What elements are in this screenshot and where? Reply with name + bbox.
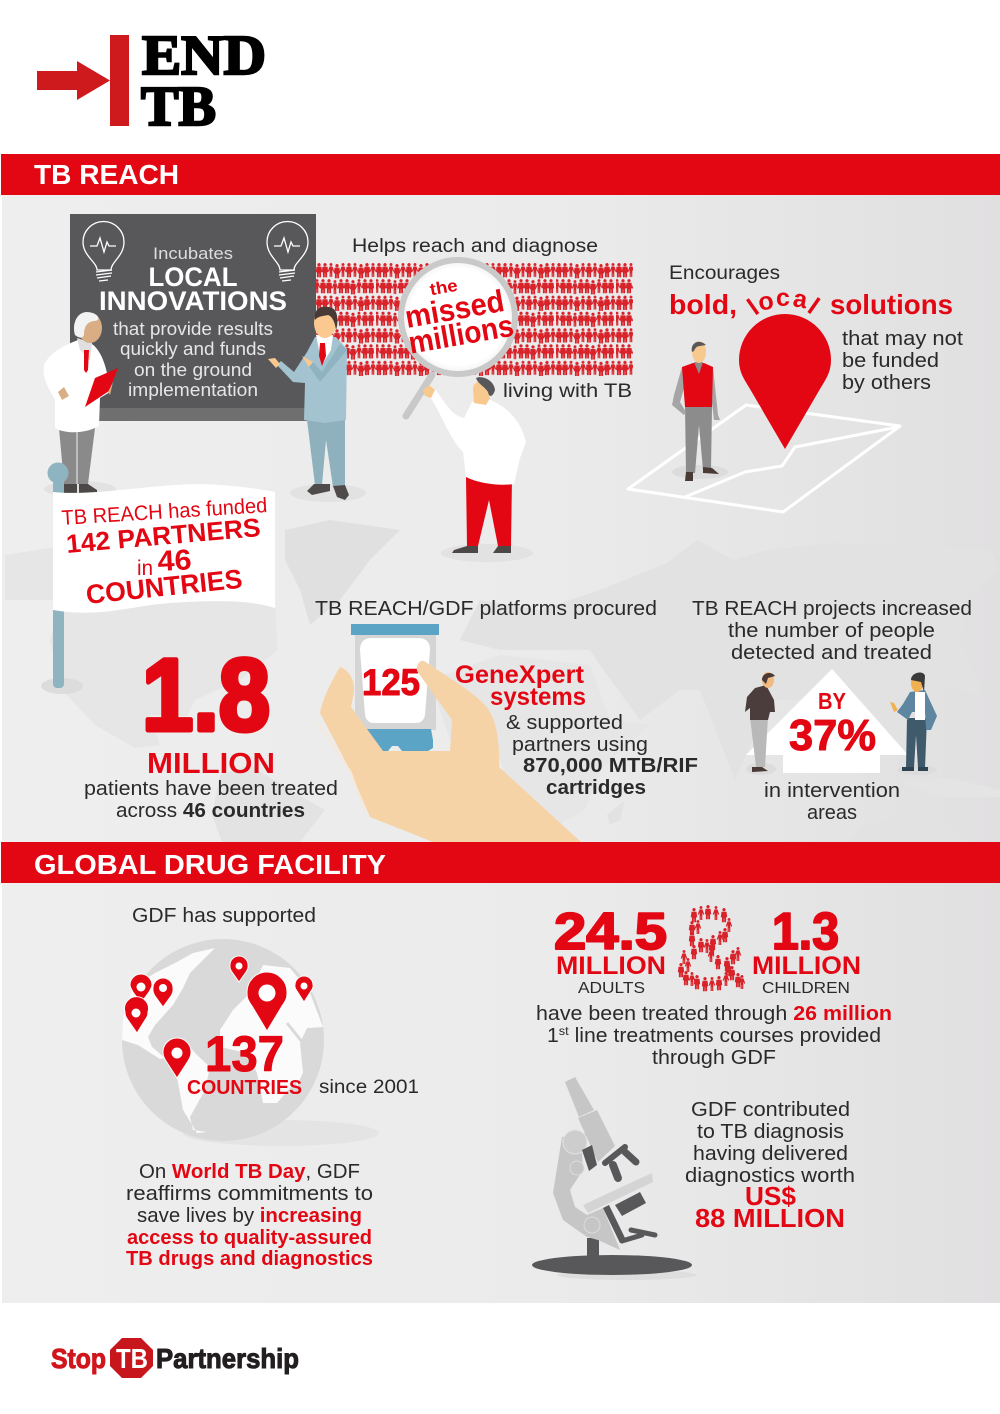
text: GDF contributed: having delivered bbox=[693, 1143, 848, 1165]
flag: partners bbox=[53, 484, 275, 613]
lens text: the missed millions: the bbox=[428, 276, 459, 299]
text: GDF contributed: GDF contributed bbox=[691, 1099, 850, 1121]
text: GeneXpert systems: & supported bbox=[506, 712, 623, 734]
text: World TB Day bbox=[126, 1161, 373, 1270]
text: treated through: 1 bbox=[547, 1025, 558, 1047]
text: GeneXpert systems: partners using bbox=[512, 734, 648, 756]
figure: man with magnifying glass bbox=[428, 377, 533, 562]
pin Canada west bbox=[130, 974, 152, 1003]
text: GDF contributed: US$ bbox=[745, 1181, 797, 1211]
text: treated through: have been treated through 26 million bbox=[536, 1003, 892, 1025]
arrow: up by 37%: BY bbox=[818, 688, 846, 714]
figure: thinking man bbox=[745, 672, 776, 775]
logo: Stop TB Partnership: TB bbox=[116, 1343, 148, 1374]
grey content panel bbox=[2, 195, 1000, 1303]
stat: 24.5 million adults: MILLION bbox=[556, 952, 666, 980]
text: treated through: through GDF bbox=[652, 1047, 776, 1069]
text: projects increased: the number of people bbox=[728, 620, 935, 642]
stat: 24.5 million adults: 24.5 bbox=[554, 903, 667, 961]
stat: 1.8 million patients bbox=[84, 638, 338, 822]
text: GeneXpert systems: cartridges bbox=[546, 777, 646, 799]
text: that may not be funded by others: by others bbox=[842, 372, 931, 394]
text: treated through: line treatments courses provided bbox=[569, 1025, 881, 1047]
section header: Global Drug Facility: GLOBAL DRUG FACILITY bbox=[34, 849, 386, 880]
section header: TB Reach: TB REACH bbox=[34, 159, 179, 190]
hand on handle bbox=[423, 385, 435, 398]
text: projects increased bbox=[692, 598, 972, 664]
text: GeneXpert systems bbox=[455, 661, 698, 799]
logo octagon bbox=[110, 1338, 153, 1378]
icon: globe with pins bbox=[122, 939, 379, 1146]
text: GeneXpert systems: systems bbox=[490, 683, 586, 711]
heading: bold local solutions: c bbox=[776, 284, 790, 312]
stat: 1.8 million patients: across 46 countries bbox=[116, 800, 305, 822]
background world map bbox=[5, 520, 1000, 842]
icon: ampersand made of people bbox=[678, 905, 745, 991]
arrow: up by 37% bbox=[746, 669, 908, 773]
stat: 1.3 million children: 1.3 bbox=[772, 903, 839, 961]
flag text: TB REACH has funded bbox=[61, 494, 268, 530]
heading: bold local solutions: l bbox=[742, 294, 764, 321]
heading: bold local solutions: solutions bbox=[830, 289, 953, 320]
board text: on the ground bbox=[134, 360, 252, 380]
logo: Stop TB Partnership: Stop bbox=[51, 1343, 106, 1374]
board text bbox=[99, 244, 287, 400]
pin small east bbox=[295, 976, 313, 1002]
figure: doctor with clipboard bbox=[44, 312, 118, 497]
text: World TB Day: On World TB Day, GDF bbox=[139, 1161, 360, 1183]
magnifying glass bbox=[399, 260, 516, 416]
stat: 24.5 million adults bbox=[554, 903, 667, 997]
board text: quickly and funds bbox=[120, 339, 266, 359]
heading: bold local solutions: o bbox=[755, 286, 776, 317]
icon: cartridge bbox=[351, 624, 439, 751]
continents bbox=[122, 948, 323, 1133]
crowd of people bbox=[316, 262, 633, 376]
figure: man in blue suit bbox=[268, 307, 366, 502]
icon: hand holding cartridge bbox=[318, 661, 581, 842]
text: World TB Day: reaffirms commitments to bbox=[126, 1183, 373, 1205]
text: GDF contributed: diagnostics worth bbox=[685, 1165, 855, 1187]
finger edge highlight bbox=[318, 723, 365, 812]
number 125: 125 bbox=[362, 662, 420, 703]
stat: 1.3 million children: MILLION bbox=[752, 952, 861, 980]
number 137: 137 bbox=[205, 1026, 284, 1082]
text: in intervention areas: areas bbox=[807, 802, 857, 824]
lens text: the missed millions bbox=[399, 267, 516, 361]
section header: TB Reach bbox=[1, 154, 1000, 195]
flag: partners: COUNTRIES bbox=[84, 564, 244, 610]
board text: LOCAL bbox=[148, 262, 238, 292]
text: GDF contributed: 88 MILLION bbox=[695, 1203, 845, 1233]
text: treated through: st bbox=[559, 1024, 569, 1038]
text: helps reach and diagnose: Helps reach and diagnose bbox=[352, 236, 598, 257]
logo text END: END bbox=[142, 25, 266, 87]
heading: bold local solutions: bold, bbox=[669, 289, 737, 320]
figure: man in red vest bbox=[672, 341, 728, 481]
text: in intervention areas bbox=[764, 780, 900, 824]
text: GDF contributed: to TB diagnosis bbox=[697, 1121, 844, 1143]
text: projects increased: detected and treated bbox=[731, 642, 932, 664]
figure: man with blue jacket bbox=[890, 673, 937, 775]
flag: partners: in bbox=[137, 557, 153, 580]
icon: microscope bbox=[532, 1077, 697, 1280]
pin small north bbox=[230, 956, 248, 982]
text: that may not be funded by others bbox=[842, 328, 963, 394]
text: World TB Day: save lives by increasing bbox=[137, 1205, 362, 1227]
stat: 1.8 million patients: 1.8 bbox=[142, 638, 270, 752]
stat: 24.5 million adults: ADULTS bbox=[578, 980, 645, 997]
map outline bbox=[628, 405, 900, 512]
logo: Stop TB Partnership: Partnership bbox=[156, 1343, 299, 1374]
arrow: up by 37%: 37% bbox=[789, 711, 876, 760]
text: GeneXpert systems: GeneXpert bbox=[455, 661, 585, 689]
lens text: the missed millions: missed bbox=[402, 283, 507, 335]
text: encourages: Encourages bbox=[669, 263, 780, 284]
text: World TB Day: TB drugs and diagnostics bbox=[126, 1248, 373, 1270]
text: in intervention areas: in intervention bbox=[764, 780, 900, 802]
text: living with TB: living with TB bbox=[503, 381, 632, 402]
pin South America bbox=[163, 1038, 191, 1078]
lens text: the missed millions: millions bbox=[406, 308, 516, 361]
stat: 1.3 million children: CHILDREN bbox=[762, 980, 850, 997]
pin Canada east bbox=[153, 978, 173, 1007]
pin large bbox=[247, 972, 287, 1031]
text: since 2001: since 2001 bbox=[319, 1077, 419, 1098]
text: GDF contributed bbox=[685, 1099, 855, 1233]
panel: chalkboard bbox=[70, 214, 316, 421]
label countries: COUNTRIES bbox=[187, 1077, 302, 1099]
stat: 1.3 million children bbox=[752, 903, 861, 997]
arrow icon bbox=[37, 61, 110, 100]
pin USA bbox=[124, 997, 148, 1033]
logo: Stop TB Partnership bbox=[51, 1338, 299, 1378]
icon: left light bulb bbox=[83, 221, 124, 281]
text: that may not be funded by others: be funded bbox=[842, 350, 939, 372]
heading: bold local solutions: a bbox=[791, 284, 811, 315]
board text: INNOVATIONS bbox=[99, 286, 287, 316]
board text: implementation bbox=[128, 380, 258, 400]
logo text TB: TB bbox=[141, 76, 216, 138]
icon: large location pin bbox=[739, 314, 831, 449]
flag pole bbox=[41, 462, 83, 694]
flag: partners: 142 PARTNERS bbox=[65, 512, 262, 559]
text: platforms procured: TB REACH/GDF platforms procured bbox=[315, 598, 657, 620]
flag: partners: 46 bbox=[157, 544, 192, 578]
text: projects increased: TB REACH projects increased bbox=[692, 598, 972, 620]
text: that may not be funded by others: that may not bbox=[842, 328, 963, 350]
board text: Incubates bbox=[153, 244, 233, 263]
stat: 1.8 million patients: MILLION bbox=[147, 748, 275, 780]
icon: right light bulb bbox=[267, 221, 308, 281]
text: GDF has supported: GDF has supported bbox=[132, 905, 316, 927]
stat: 1.8 million patients: patients have been treated bbox=[84, 778, 338, 800]
heading: bold local solutions: l bbox=[803, 293, 824, 320]
text: GeneXpert systems: 870,000 MTB/RIF bbox=[523, 755, 698, 777]
text: World TB Day: access to quality-assured bbox=[127, 1227, 372, 1249]
section header: Global Drug Facility bbox=[1, 842, 1000, 883]
board text: that provide results bbox=[113, 319, 273, 339]
text: treated through bbox=[536, 1003, 892, 1069]
logo: End TB bbox=[37, 25, 266, 138]
heading: bold local solutions bbox=[669, 284, 953, 321]
red bar bbox=[110, 35, 129, 126]
